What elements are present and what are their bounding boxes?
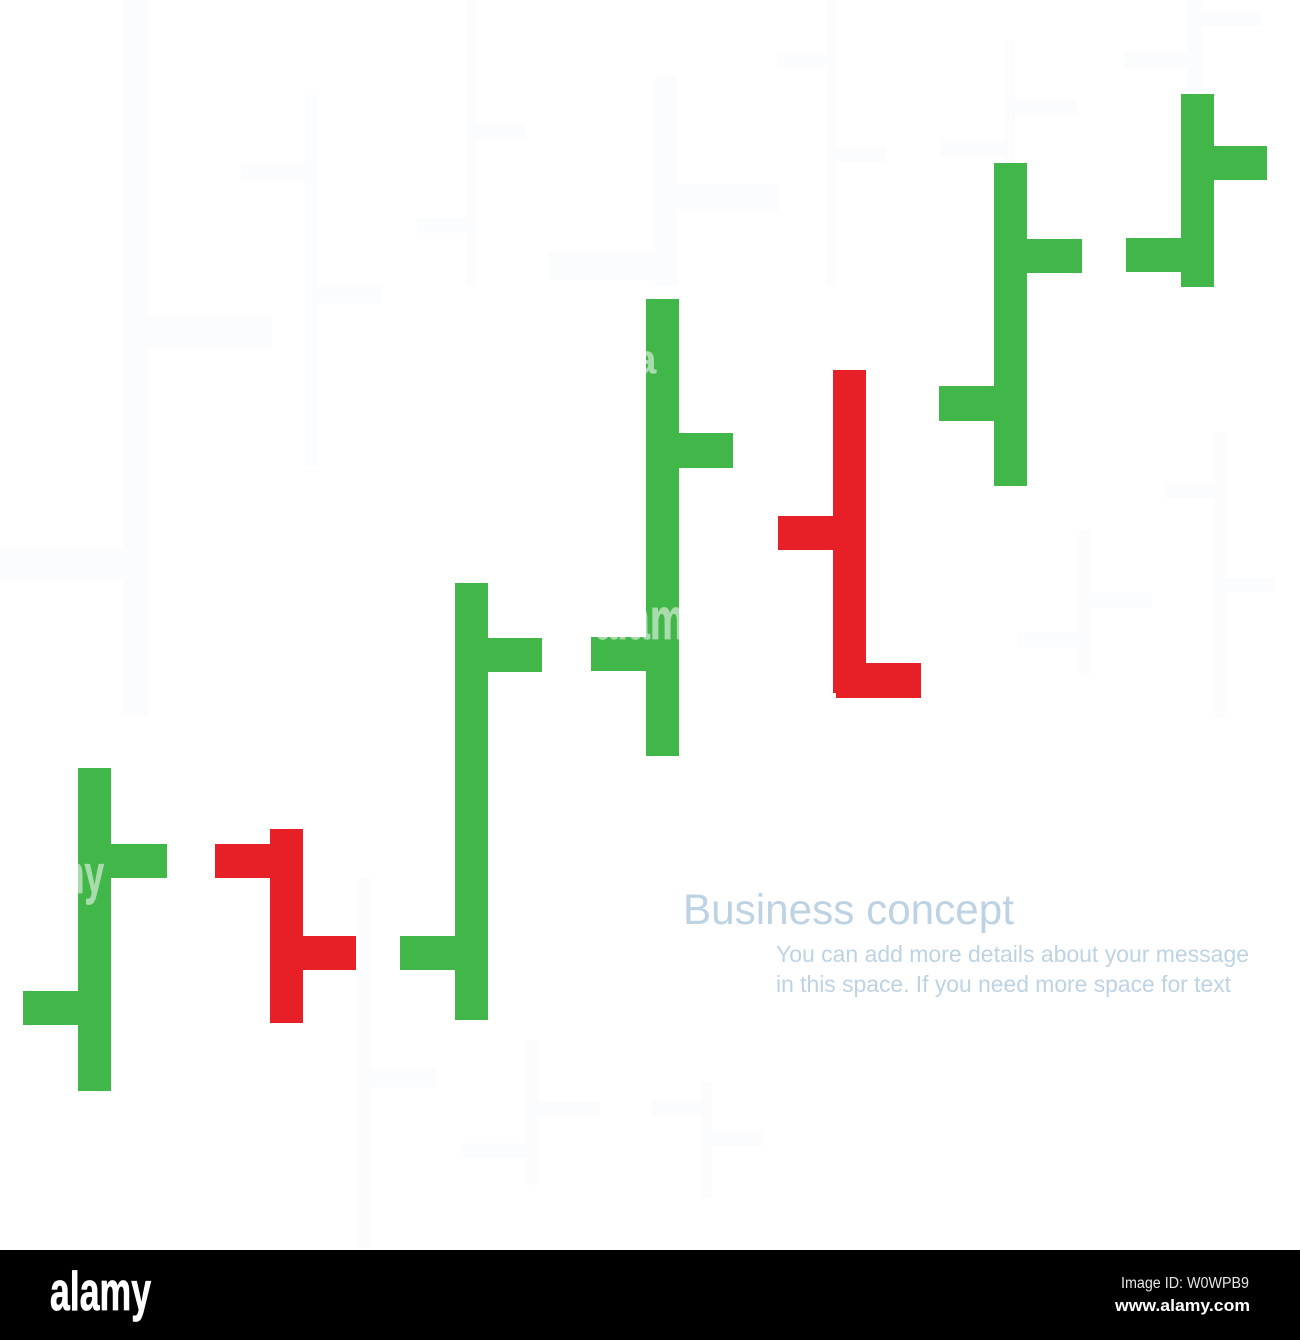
green bar 1 (23, 768, 167, 1091)
green bar 7 (1126, 94, 1267, 287)
red bar 2 (215, 829, 356, 1023)
watermark fragments (63, 338, 685, 905)
red bar 5 (778, 370, 921, 698)
footer bar (0, 1250, 1300, 1340)
description text: You can add more details about your message (776, 941, 1249, 967)
green bar 6 (939, 163, 1082, 486)
footer image id: Image ID: W0WPB9 (1121, 1275, 1249, 1292)
description text (776, 941, 1249, 997)
description text: in this space. If you need more space for text (776, 971, 1232, 997)
footer image id: www.alamy.com (1114, 1296, 1250, 1315)
watermark fragments: a (636, 338, 657, 382)
heading: Business concept (683, 887, 1014, 934)
footer image id (1114, 1275, 1250, 1315)
watermark fragments: ny (63, 843, 104, 905)
footer logo: alamy (50, 1260, 151, 1322)
watermark fragments: alam (595, 587, 685, 652)
green bar 4 (591, 299, 733, 756)
green bar 3 (400, 583, 542, 1020)
